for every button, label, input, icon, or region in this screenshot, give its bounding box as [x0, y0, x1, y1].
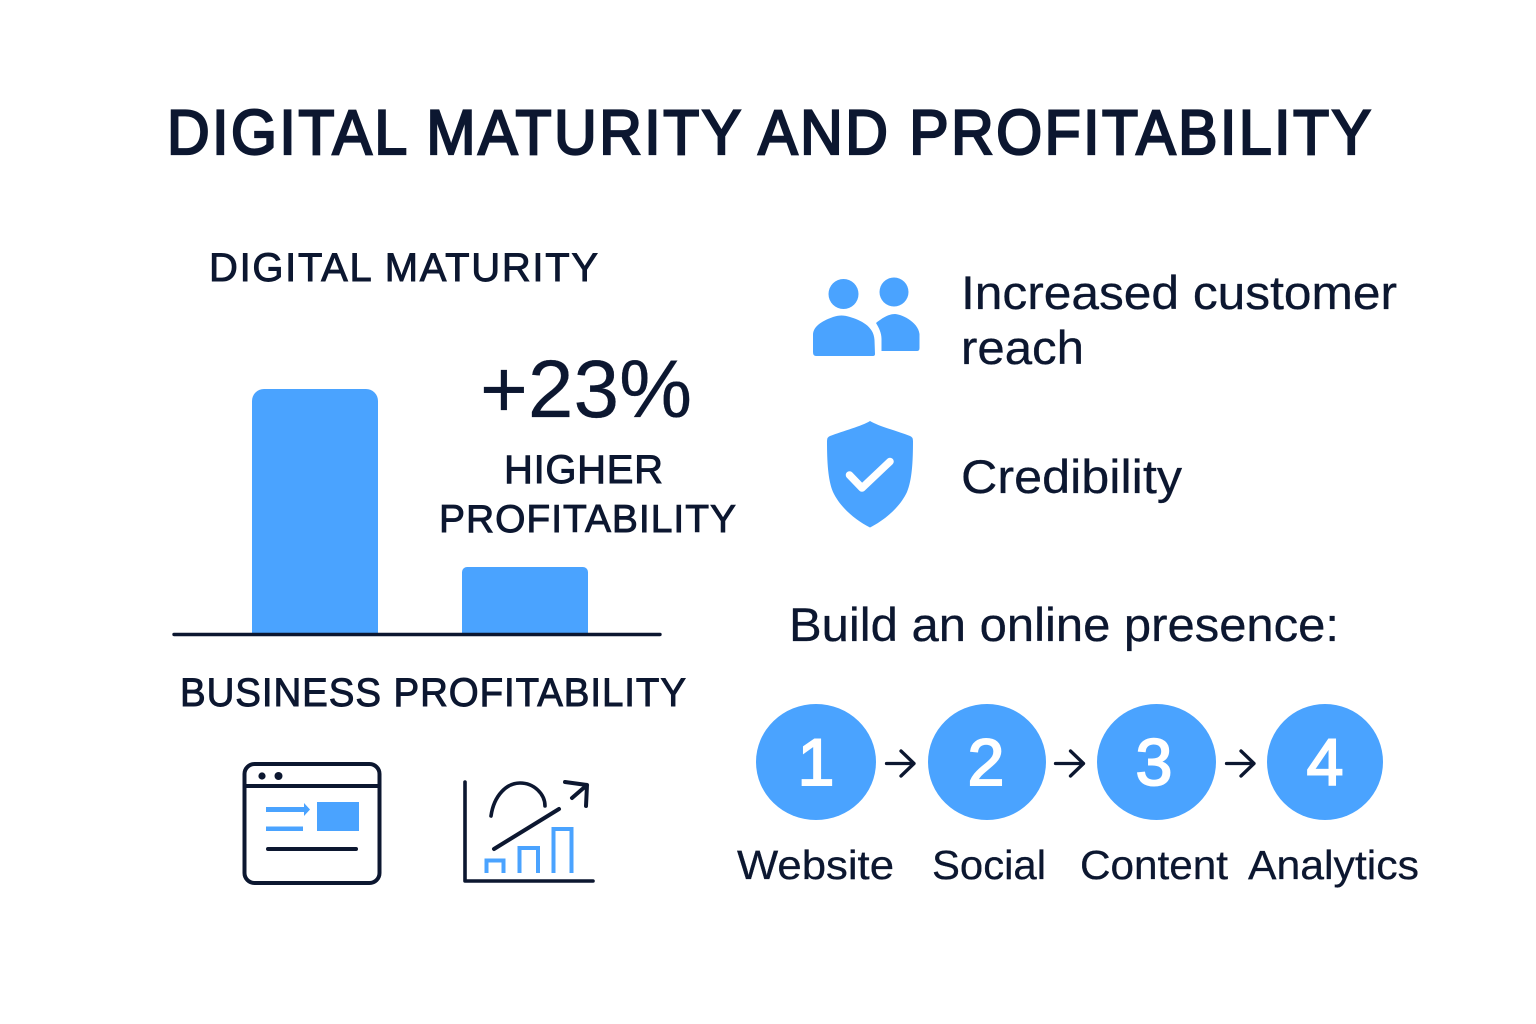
- title: DIGITAL MATURITY AND PROFITABILITY: [167, 97, 1371, 167]
- text: credibility: Credibility: [961, 450, 1183, 503]
- stat label: HIGHER: [504, 448, 663, 492]
- step 4: analytics: Analytics: [1248, 842, 1419, 888]
- step 2: social: [928, 704, 1046, 888]
- step 1: website: 1: [798, 725, 834, 799]
- heading: digital maturity: DIGITAL MATURITY: [209, 246, 598, 290]
- step 2: social: Social: [932, 842, 1046, 888]
- arrow 1: [886, 751, 914, 776]
- step 3: content: [1080, 704, 1229, 888]
- step 1: website: Website: [737, 842, 894, 888]
- heading: business profitability: BUSINESS PROFITABILITY: [180, 670, 686, 715]
- step 2: social: 2: [968, 725, 1004, 799]
- step 1: website: [737, 704, 894, 888]
- step 3: content: Content: [1080, 842, 1229, 888]
- heading: build an online presence: Build an online presence:: [789, 598, 1339, 651]
- text: increased customer reach: Increased customer: [961, 266, 1397, 319]
- step 4: analytics: [1248, 704, 1419, 888]
- stat: +23%: +23%: [480, 344, 692, 435]
- arrow 2: [1056, 751, 1084, 776]
- step 3: content: 3: [1136, 725, 1172, 799]
- text: increased customer reach: [961, 266, 1397, 374]
- text: increased customer reach: reach: [961, 321, 1084, 374]
- bar: digital maturity: [252, 389, 378, 634]
- icon: shield check: [827, 421, 913, 528]
- chart axis: [174, 633, 660, 636]
- bar: business profitability: [462, 567, 588, 634]
- bar chart: [174, 389, 660, 634]
- stat label: PROFITABILITY: [439, 498, 736, 541]
- stat label: [439, 448, 736, 541]
- icon: growth chart: [465, 782, 593, 881]
- icon: people: [813, 278, 920, 356]
- arrow 3: [1226, 751, 1254, 776]
- step 4: analytics: 4: [1307, 725, 1343, 799]
- icon: website window: [244, 764, 380, 883]
